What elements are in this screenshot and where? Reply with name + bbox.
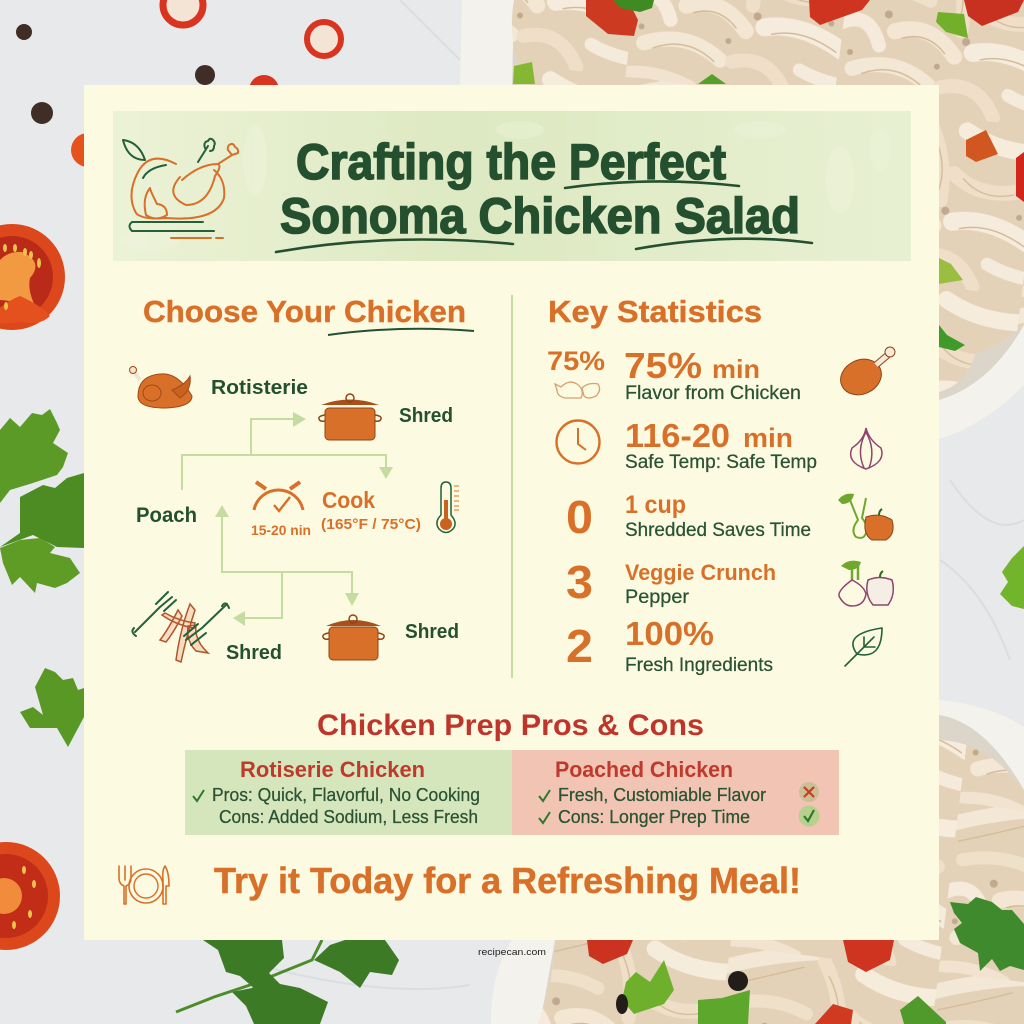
peppercorns (16, 24, 215, 124)
parsley, small sprig (20, 668, 84, 747)
call to action: Try it Today for a Refreshing Meal! (214, 860, 801, 901)
stat row: 1 cup shredded saves time: Shredded Saves Time (625, 520, 811, 541)
main cream panel (84, 85, 939, 940)
stat row: 75% flavor from chicken: min (712, 354, 760, 384)
label: rotisterie: Rotisterie (211, 377, 308, 399)
stat row: 1 cup shredded saves time (566, 491, 893, 543)
stat row: veggie crunch pepper: Pepper (625, 587, 690, 608)
stat row: 116-20 min safe temp: 116-20 (625, 417, 730, 454)
icon: timer (254, 482, 303, 511)
icon: roast chicken line art (123, 139, 238, 238)
panel: poached chicken: Fresh, Customiable Flavor (558, 785, 766, 805)
pros and cons table (185, 750, 839, 835)
section heading: choose your chicken: Choose Your Chicken (143, 294, 466, 329)
bowl of chicken salad: bottom right (491, 700, 1024, 1024)
tomato half, lower left (0, 842, 60, 950)
icon: plate and cutlery (119, 866, 169, 904)
section heading: pros and cons: Chicken Prep Pros & Cons (317, 709, 704, 742)
parsley, upper leaf (0, 409, 68, 503)
column divider (511, 295, 513, 678)
stat row: 116-20 min safe temp (556, 417, 882, 473)
arrows: lower branch (215, 505, 359, 626)
label: poach: Poach (136, 504, 197, 527)
flow diagram: chicken preparation (130, 366, 459, 664)
panel: poached chicken (512, 750, 839, 835)
parsley, right edge (1000, 546, 1024, 609)
stat row: 75% flavor from chicken: 75% (624, 345, 702, 386)
header banner (113, 111, 911, 261)
parsley leaf on salad (950, 897, 1024, 971)
stats list (547, 345, 895, 676)
panel: rotisserie chicken: Pros: Quick, Flavorful, No Cooking (212, 785, 480, 805)
stat row: 100% fresh ingredients: 2 (566, 620, 593, 672)
panel: rotisserie chicken (185, 750, 512, 835)
title (276, 134, 812, 252)
stat row: veggie crunch pepper: Veggie Crunch (625, 560, 776, 585)
icon: pot, bottom (323, 615, 384, 660)
stat row: 75% flavor from chicken: 75% (547, 346, 605, 376)
source credit: recipecan.com (478, 947, 546, 957)
stat row: 100% fresh ingredients (566, 615, 882, 676)
parsley, middle leaf (0, 473, 84, 548)
stat row: 100% fresh ingredients: 100% (625, 615, 714, 652)
label: shred, bottom left: Shred (226, 642, 282, 664)
icon: rotisserie chicken (130, 366, 192, 408)
parsley sprigs (0, 409, 1024, 1024)
stat row: 1 cup shredded saves time: 0 (566, 491, 593, 543)
stat row: veggie crunch pepper (566, 556, 893, 608)
arrows: top branch (182, 412, 393, 490)
panel: rotisserie chicken: Cons: Added Sodium, Less Fresh (219, 807, 478, 827)
panel: poached chicken: Poached Chicken (555, 757, 733, 782)
bowl of chicken salad: top right (460, 0, 1024, 439)
label: 15-20 nin: 15-20 nin (251, 522, 311, 538)
title: Crafting the Perfect (296, 134, 726, 190)
label: shred, top: Shred (399, 405, 453, 427)
stat row: 116-20 min safe temp: min (743, 423, 793, 453)
icon: thermometer (437, 482, 459, 532)
label: cook: Cook (322, 487, 375, 513)
panel: rotisserie chicken: Rotiserie Chicken (240, 757, 425, 782)
title: Sonoma Chicken Salad (280, 188, 800, 244)
icon: shredded chicken with forks (132, 592, 229, 662)
pepper rings (163, 0, 203, 25)
stat row: 1 cup shredded saves time: 1 cup (625, 491, 686, 519)
stat row: 116-20 min safe temp: Safe Temp: Safe Temp (625, 452, 817, 473)
stat row: veggie crunch pepper: 3 (566, 556, 593, 608)
panel: poached chicken: Cons: Longer Prep Time (558, 807, 750, 827)
tomato slices (0, 0, 341, 950)
label: cook temperature: (165°F / 75°C) (321, 516, 421, 533)
stat row: 75% flavor from chicken: Flavor from Chicken (625, 383, 801, 404)
label: shred, bottom right: Shred (405, 621, 459, 643)
stat row: 100% fresh ingredients: Fresh Ingredients (625, 655, 773, 676)
section heading: key statistics: Key Statistics (548, 294, 762, 329)
tomato half, upper left (0, 224, 65, 330)
icon: pot, top (319, 394, 381, 440)
parsley, lower leaf (0, 538, 80, 593)
stat row: 75% flavor from chicken (547, 345, 895, 404)
parsley, bottom sprig (176, 940, 399, 1024)
